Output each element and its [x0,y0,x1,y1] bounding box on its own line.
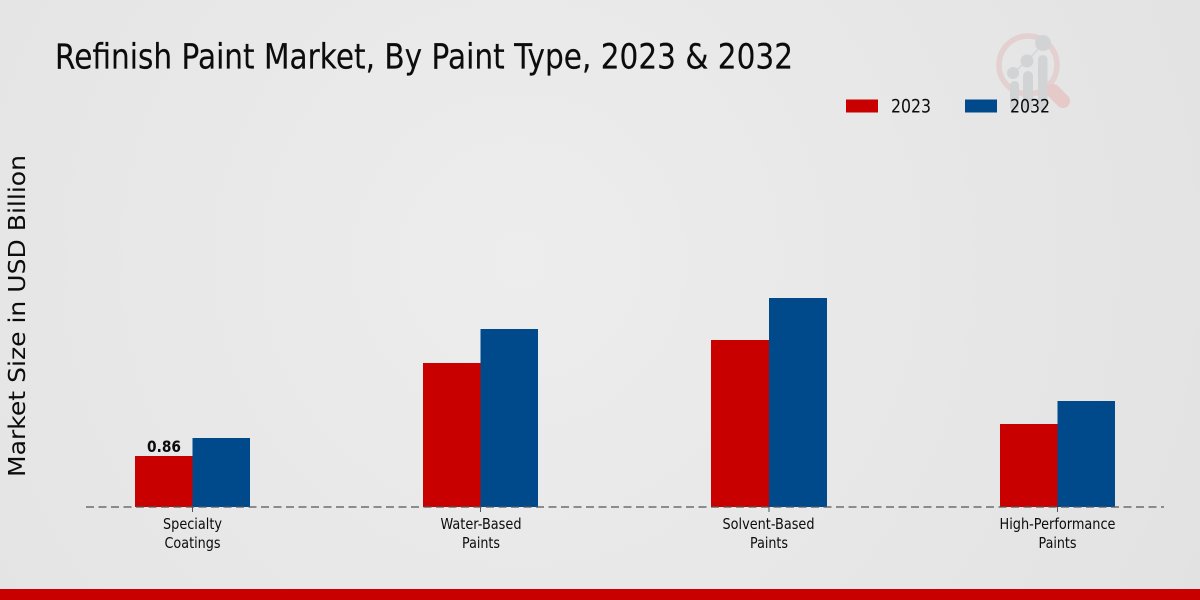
group: Specialty Coatings: 0.86 [147,437,181,456]
group: Water-Based Paints: Paints [462,534,500,552]
group: Solvent-Based Paints: Paints [750,534,788,552]
group: Solvent-Based Paints: Solvent-Based [722,515,814,533]
title: Refinish Paint Market, By Paint Type, 2023 & 2032 [55,38,793,78]
group: Water-Based Paints [423,329,538,552]
group: High-Performance Paints: High-Performance [1000,515,1116,533]
icon: watermark logo [999,35,1063,111]
footer bar [0,589,1200,600]
legend item: 2023: 2023 [891,96,931,118]
bar chart [86,298,1164,552]
legend item: 2032: 2032 [1010,96,1050,118]
group: Solvent-Based Paints [711,298,827,552]
group: Water-Based Paints: Water-Based [440,515,522,533]
y-axis label: Market Size in USD Billion [3,155,31,477]
group: Specialty Coatings: Specialty [163,515,222,533]
group: Specialty Coatings [135,437,250,552]
group: Specialty Coatings: Coatings [164,534,221,552]
legend item: 2023 [846,96,931,118]
legend [846,96,1050,118]
legend item: 2032 [965,96,1050,118]
group: High-Performance Paints [1000,401,1116,552]
group: High-Performance Paints: Paints [1038,534,1077,552]
